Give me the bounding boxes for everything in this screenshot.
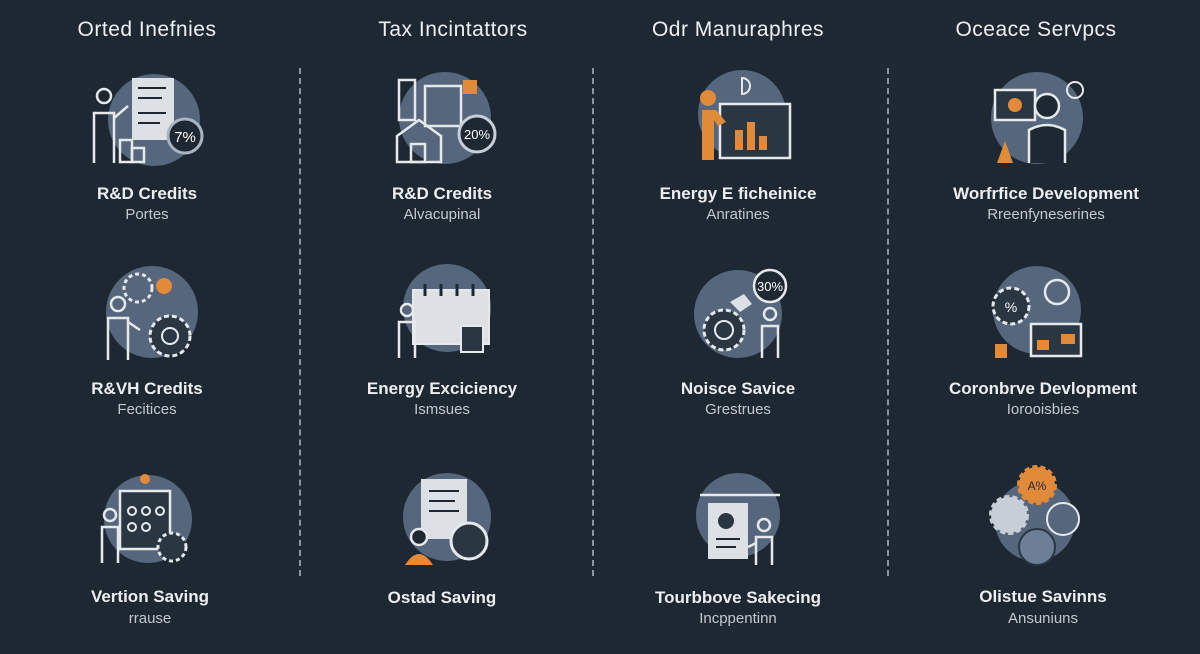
subtitle: Ismsues xyxy=(414,401,470,418)
subtitle: Portes xyxy=(125,206,169,223)
title: Vertion Saving xyxy=(91,587,209,606)
icon: workforce xyxy=(991,72,1084,164)
icon: noise 30%: 30% xyxy=(757,279,783,294)
subtitle: rrause xyxy=(129,610,171,627)
title: Energy E ficheinice xyxy=(660,184,816,203)
title: R&D Credits xyxy=(392,184,492,203)
title: Noisce Savice xyxy=(681,379,795,398)
subtitle: Incppentinn xyxy=(699,610,777,627)
subtitle: Iorooisbies xyxy=(1007,401,1079,418)
heading: column 2: Tax Incintattors xyxy=(378,18,528,41)
icon: gears person xyxy=(106,266,198,360)
heading: column 3: Odr Manuraphres xyxy=(652,18,824,41)
title: Olistue Savinns xyxy=(979,587,1107,606)
title: Energy Exciciency xyxy=(367,379,517,398)
icon: r&d credits person document: 7% xyxy=(174,129,196,146)
title: Ostad Saving xyxy=(388,588,496,607)
icon: tax building 20% xyxy=(396,72,496,164)
title: r&d credits: R&D Credits xyxy=(97,184,197,203)
title: Tourbbove Sakecing xyxy=(655,588,821,607)
subtitle xyxy=(312,610,572,627)
subtitle: Anratines xyxy=(706,206,770,223)
title: Worfrfice Development xyxy=(953,184,1139,203)
icon: energy calendar xyxy=(398,264,491,358)
subtitle: Rreenfyneserines xyxy=(987,206,1105,223)
icon: corporate percent gears: % xyxy=(1005,299,1017,315)
icon: gear cluster: A% xyxy=(1028,479,1047,493)
subtitle: Grestrues xyxy=(705,401,771,418)
icon: gear cluster xyxy=(989,465,1080,566)
subtitle: Ansuniuns xyxy=(1008,610,1078,627)
heading: column 4: Oceace Servpcs xyxy=(955,18,1117,41)
icon: tax building 20%: 20% xyxy=(464,127,490,142)
icon: noise 30% xyxy=(694,268,788,358)
subtitle: Alvacupinal xyxy=(404,206,480,223)
icon: calculator xyxy=(100,474,192,563)
icon: energy person with board xyxy=(698,70,792,160)
icon: certificate xyxy=(696,473,780,565)
icon: r&d credits person document xyxy=(92,74,204,166)
heading: column 1: Orted Inefnies xyxy=(78,18,216,41)
icon: corporate percent gears xyxy=(992,266,1082,358)
icon: documents person xyxy=(403,473,491,565)
subtitle: Fecitices xyxy=(117,401,177,418)
title: R&VH Credits xyxy=(91,379,203,398)
title: Coronbrve Devlopment xyxy=(949,379,1137,398)
